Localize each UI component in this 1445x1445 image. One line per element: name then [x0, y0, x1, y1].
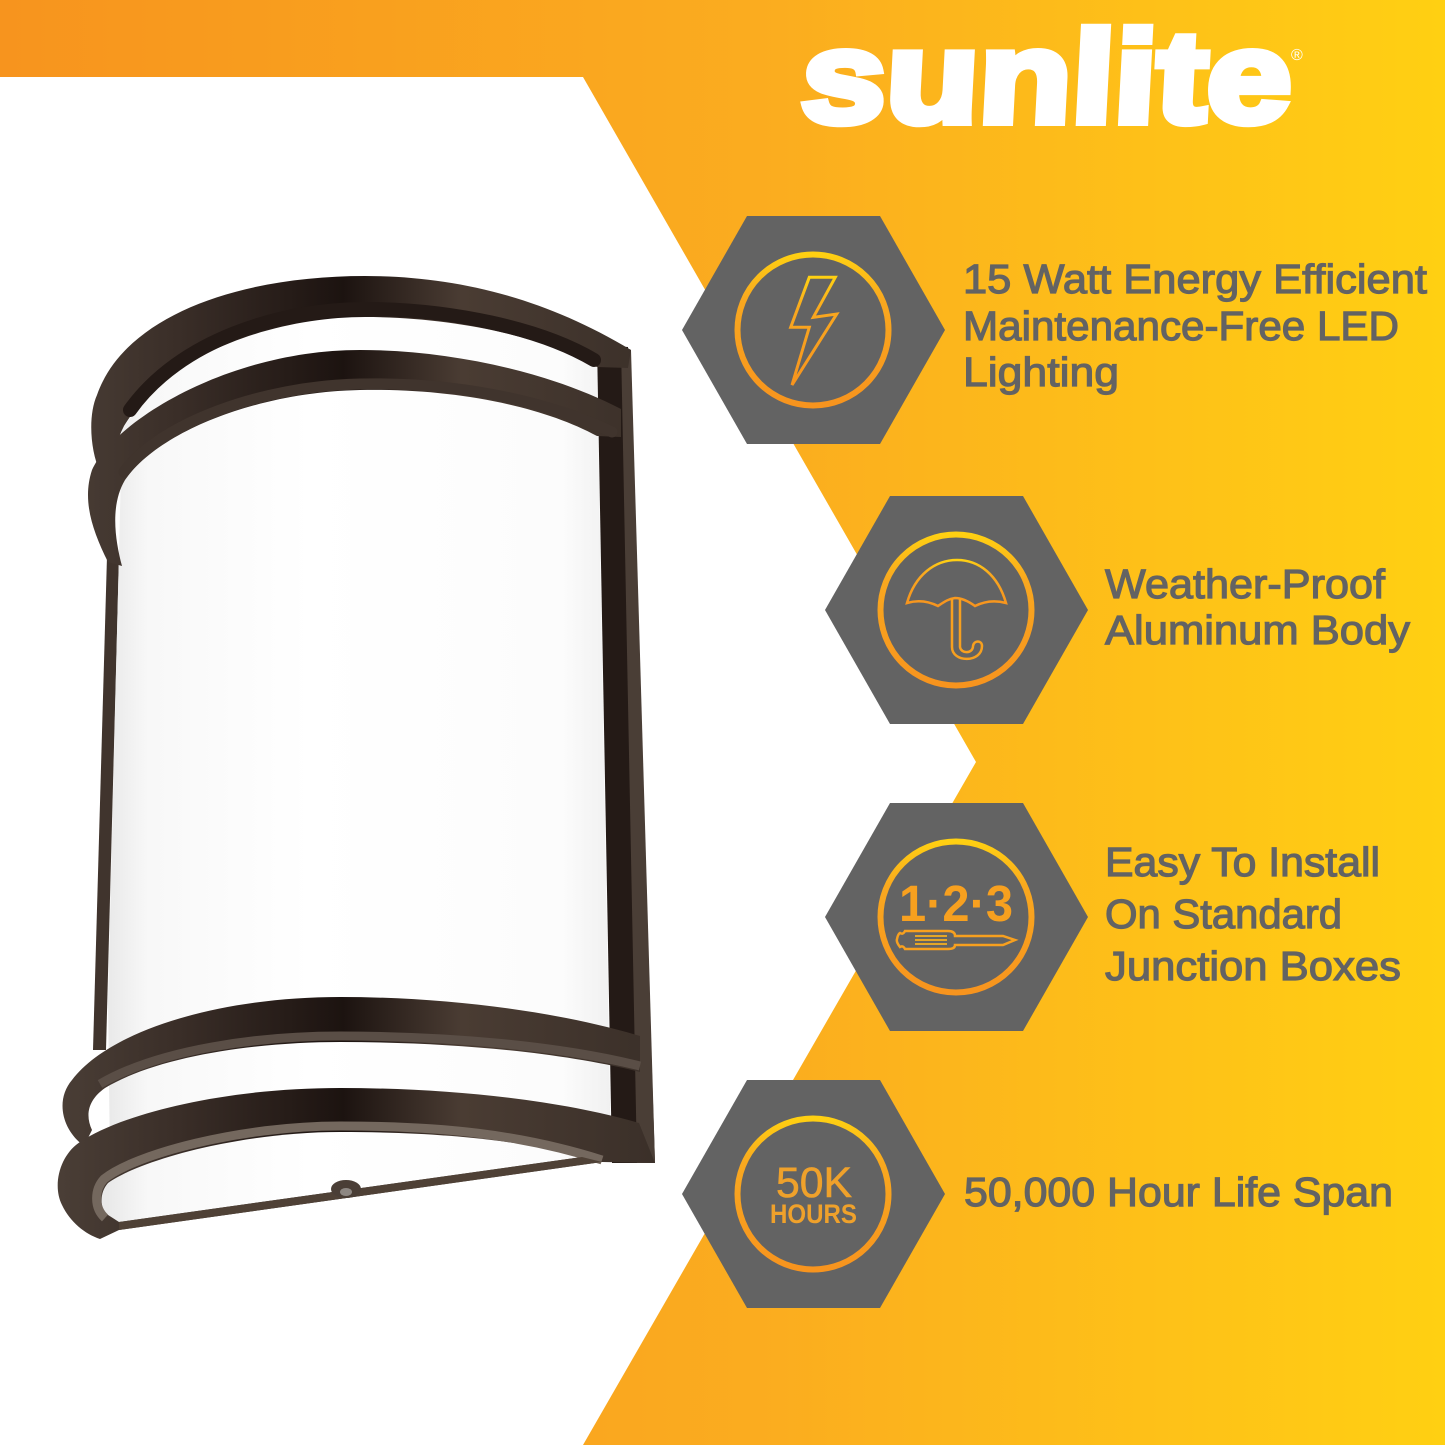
feature: weather proof [825, 496, 1411, 724]
bottom band 2 [58, 1088, 655, 1239]
hexagon badge: life span [682, 1080, 945, 1308]
feature: energy efficient [682, 216, 1428, 444]
text: weather proof [1105, 561, 1411, 653]
text: 15 watt [963, 256, 1428, 395]
text: easy install: Junction Boxes [1105, 943, 1401, 989]
feature: life span [682, 1080, 1393, 1308]
hexagon badge: install [825, 803, 1088, 1031]
text: easy install: Easy To Install [1105, 839, 1380, 885]
text: 15 watt: Maintenance-Free LED [963, 303, 1399, 349]
feature: easy install [825, 803, 1401, 1031]
icon: 1-2-3 screwdriver in ring: 1·2·3 [899, 875, 1013, 932]
text: life span: 50,000 Hour Life Span [964, 1169, 1393, 1215]
icon: 50K hours in ring: HOURS [770, 1199, 857, 1229]
text: easy install: On Standard [1105, 891, 1342, 937]
text: weather proof: Weather-Proof [1105, 561, 1386, 607]
hexagon badge: energy [682, 216, 945, 444]
product photo: wall sconce [58, 276, 655, 1239]
bottom opening [102, 1132, 582, 1222]
text: weather proof: Aluminum Body [1105, 607, 1411, 653]
icon: 50K hours in ring [738, 1118, 888, 1270]
band 1 [91, 276, 631, 472]
white product panel [0, 77, 976, 1445]
icon: 1-2-3 screwdriver in ring [880, 842, 1032, 992]
icon: umbrella in ring [880, 534, 1032, 686]
icon: 50K hours in ring: 50K [776, 1159, 852, 1207]
text: 15 watt: Lighting [963, 349, 1119, 395]
hexagon badge: weather [825, 496, 1088, 724]
text: 15 watt: 15 Watt Energy Efficient [963, 256, 1428, 302]
text: easy install [1105, 839, 1401, 989]
logo: Sunlite: ® [1291, 47, 1303, 64]
icon: lightning bolt in ring [738, 254, 888, 406]
bottom band 1 [63, 997, 640, 1146]
band 2 [88, 350, 621, 566]
logo: Sunlite: sunlite [798, 4, 1296, 150]
